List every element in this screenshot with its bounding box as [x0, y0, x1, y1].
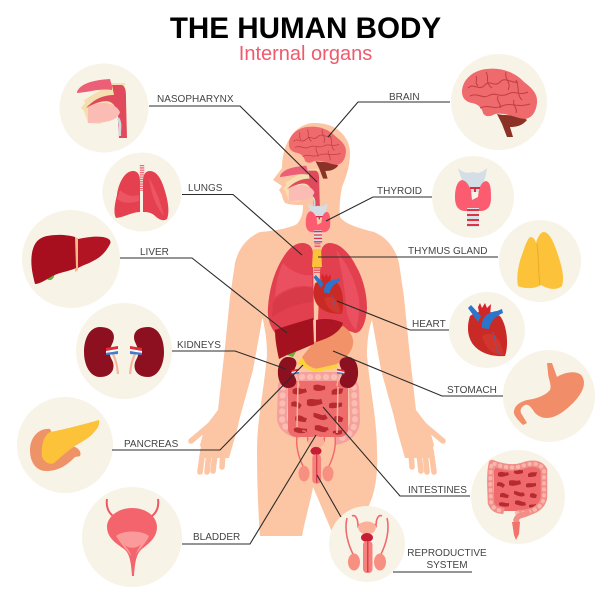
organ: stomach on body: [302, 326, 353, 369]
organ: ureters on body: [297, 383, 338, 433]
label: reproductive system: REPRODUCTIVE: [407, 548, 487, 559]
organ: reproductive system on body: [297, 431, 335, 484]
panel: reproductive system: [329, 506, 405, 582]
organ: small intestine on body: [288, 381, 348, 437]
label: reproductive system: SYSTEM: [426, 560, 468, 571]
icon: bladder: [107, 499, 158, 576]
title: THE HUMAN BODY: [170, 12, 441, 45]
panel: heart: [449, 292, 525, 368]
organ: lower trachea on body: [314, 267, 320, 273]
label: pancreas: PANCREAS: [124, 439, 179, 450]
label: liver: [120, 247, 287, 333]
organ: thyroid on body: [306, 203, 330, 243]
label: intestines: [323, 407, 470, 496]
label: thyroid: [326, 186, 432, 221]
icon: pancreas body: [42, 420, 99, 464]
label: stomach: [333, 351, 503, 396]
panel: nasopharynx: [60, 64, 148, 152]
panel: lungs: [102, 152, 182, 232]
label: heart: HEART: [412, 319, 446, 330]
panel: thyroid: [432, 156, 514, 238]
subtitle: Internal organs: [239, 43, 372, 65]
panel: thymus gland: [499, 220, 581, 302]
label: lungs: LUNGS: [188, 183, 223, 194]
label: kidneys: KIDNEYS: [177, 340, 221, 351]
icon: stomach: [514, 363, 584, 425]
organ: liver on body: [275, 318, 343, 359]
label: kidneys: [172, 340, 286, 369]
label: liver: LIVER: [140, 247, 169, 258]
panel: stomach: [503, 350, 595, 442]
organ: lungs on body: [268, 243, 367, 333]
panel: intestines: [471, 450, 565, 544]
icon: lungs: [114, 171, 168, 220]
panel: kidneys: [76, 303, 172, 399]
organ: left kidney on body: [278, 357, 299, 388]
organ: nasopharynx on body: [280, 166, 320, 213]
label: nasopharynx: [149, 94, 317, 182]
icon: thymus: [517, 232, 563, 289]
label: brain: [328, 92, 450, 137]
organ: trachea on body: [314, 232, 320, 248]
panel: brain: [451, 54, 547, 150]
icon: intestines: [490, 463, 544, 540]
label: thymus gland: THYMUS GLAND: [408, 246, 487, 257]
icon: duodenum: [30, 429, 81, 471]
panel: liver: [22, 210, 120, 308]
organ: heart on body: [314, 273, 343, 314]
organ: gallbladder on body: [287, 350, 297, 357]
organ: brain on body: [289, 127, 346, 179]
organ: pancreas on body: [297, 357, 337, 372]
panel: bladder: [82, 487, 182, 587]
label: pancreas: [112, 365, 303, 450]
label: intestines: INTESTINES: [408, 485, 467, 496]
panel: pancreas: [17, 397, 113, 493]
label: reproductive system: [317, 475, 487, 572]
organ: right kidney on body: [337, 357, 358, 388]
label: thyroid: THYROID: [377, 186, 422, 197]
label: bladder: BLADDER: [193, 532, 240, 543]
label: brain: BRAIN: [389, 92, 420, 103]
organs on body: [268, 127, 367, 484]
organ: thymus on body: [312, 249, 322, 267]
organ: large intestine on body: [282, 377, 355, 440]
label: bladder: [182, 435, 316, 544]
body silhouette: [191, 123, 443, 540]
label: heart: [337, 301, 449, 330]
icon: liver: [31, 235, 111, 284]
label: stomach: STOMACH: [447, 385, 497, 396]
label: lungs: [182, 183, 302, 255]
icon: trachea: [140, 165, 144, 191]
label: nasopharynx: NASOPHARYNX: [157, 94, 234, 105]
